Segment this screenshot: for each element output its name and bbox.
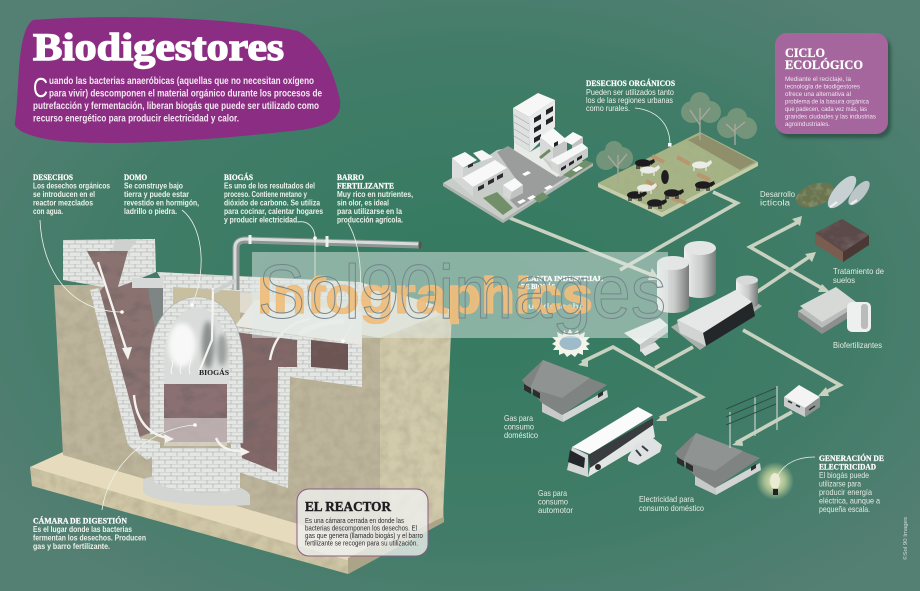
pipe inside dome xyxy=(199,288,213,372)
heading: ciclo ecológico: CICLO xyxy=(785,45,825,60)
text: cámara de digestión: fermentan los desechos. Producen xyxy=(33,534,146,542)
back wall patch xyxy=(173,287,240,330)
watermark text outline: Sol90images xyxy=(258,250,666,335)
illustration: industrial biogas plant xyxy=(624,241,762,356)
biogas pipe xyxy=(214,235,422,292)
text: desechos orgánicos: DESECHOS ORGÁNICOS xyxy=(586,78,676,88)
text: right labels: ictícola xyxy=(760,198,790,208)
lintel and pillar xyxy=(132,278,173,327)
city base xyxy=(443,148,593,220)
text: cámara de digestión xyxy=(33,516,146,551)
text: lower labels xyxy=(504,413,704,515)
icon: fish farming xyxy=(792,172,873,212)
text: desechos: con agua. xyxy=(33,207,63,216)
illustration: rural farm xyxy=(596,92,758,217)
text: domo: ladrillo o piedra. xyxy=(124,207,177,216)
illustration: house with gas xyxy=(522,360,608,422)
storage tanks xyxy=(657,241,758,313)
intake chamber xyxy=(87,251,155,438)
text: cámara de digestión: gas y barro fertilizante. xyxy=(33,542,110,551)
text: barro fertilizante: para utilizarse en la xyxy=(337,207,402,216)
text: lower labels: Gas para xyxy=(538,488,567,498)
text: domo: tierra y puede estar xyxy=(124,190,189,199)
ciclo description: agroindustriales. xyxy=(785,121,830,128)
text: desechos orgánicos: los de las regiones urbanas xyxy=(586,95,673,105)
introduction text xyxy=(33,72,322,124)
text: biogás xyxy=(224,172,323,224)
flow arrows xyxy=(98,262,344,456)
text: generación de electricidad xyxy=(819,453,884,514)
text: desechos orgánicos: como rurales. xyxy=(586,103,630,113)
text: right labels xyxy=(760,189,884,350)
parked cars xyxy=(517,166,583,204)
ciclo description: Mediante el reciclaje, la xyxy=(785,76,851,83)
text: biogás: proceso. Contiene metano y xyxy=(224,190,307,199)
illustration: generator building xyxy=(784,385,820,417)
plant label under watermark xyxy=(521,274,603,311)
icon: biofertilizer xyxy=(798,287,871,334)
text: barro fertilizante: BARRO xyxy=(337,173,364,182)
ciclo description: ofrece una alternativa al xyxy=(785,91,851,98)
outlet top cover xyxy=(235,300,362,345)
text: domo: DOMO xyxy=(124,173,147,182)
brick dome xyxy=(150,297,243,443)
back brick band xyxy=(157,272,362,302)
panel: title and introduction xyxy=(15,17,340,143)
foundation slab xyxy=(30,452,444,574)
icon: gas flame xyxy=(552,329,590,357)
text: biogás: y producir electricidad. xyxy=(224,216,299,224)
plant platform xyxy=(671,290,762,350)
intake chimney bricks xyxy=(63,239,156,287)
street xyxy=(497,146,590,208)
text: desechos orgánicos: Pueden ser utilizados tanto xyxy=(586,87,674,97)
heading: el reactor: EL REACTOR xyxy=(305,500,392,515)
reactor top surface xyxy=(157,272,452,340)
plant label under watermark: PLANTA INDUSTRIAL xyxy=(521,274,603,283)
text: desechos xyxy=(33,173,110,216)
gas space inside dome xyxy=(164,307,229,386)
heading: ciclo ecológico: ECOLÓGICO xyxy=(785,57,863,72)
text: generación de electricidad: utilizarse para xyxy=(819,478,861,488)
text: desechos: reactor mezclados xyxy=(33,198,93,208)
reactor description: bacterias descomponen los desechos. El xyxy=(305,524,417,532)
leader: generación de electricidad xyxy=(778,457,815,475)
digester base bricks xyxy=(143,448,250,506)
text: generación de electricidad: eléctrica, aunque a xyxy=(819,496,880,506)
left building complex xyxy=(452,150,523,200)
text: cámara de digestión: Es el lugar donde las bacterias xyxy=(33,525,132,534)
panel: reactor illustration xyxy=(30,235,452,574)
text: generación de electricidad: El biogás puede xyxy=(819,470,869,480)
text: generación de electricidad: pequeña escala. xyxy=(819,504,870,514)
reactor front wall xyxy=(54,285,380,548)
illustration: power lines xyxy=(726,386,777,448)
ciclo description: tecnología de biodigestores xyxy=(785,84,861,90)
small plant building xyxy=(624,318,668,356)
text: lower labels: doméstico xyxy=(504,430,538,440)
plant label under watermark: Sus desechos xyxy=(521,302,592,311)
text: barro fertilizante: Muy rico en nutrientes, xyxy=(337,190,413,199)
introduction text: uando las bacterias anaeróbicas (aquellas que no necesitan oxígeno xyxy=(49,76,314,87)
icon: light bulb xyxy=(756,462,794,500)
introduction text: recurso energético para producir electricidad y calor. xyxy=(33,114,239,124)
ciclo description: problema de la basura orgánica xyxy=(785,98,869,106)
shed xyxy=(677,290,755,346)
text: biogás: dióxido de carbono. Se utiliza xyxy=(224,198,320,208)
text: lower labels: consumo doméstico xyxy=(639,503,704,513)
text: lower labels: automotor xyxy=(538,505,573,515)
text: lower labels: Electricidad para xyxy=(639,494,694,504)
biogas bubbles xyxy=(171,356,191,374)
text: biogás: para cocinar, calentar hogares xyxy=(224,207,323,216)
copyright credit: ©Sol 90 Images xyxy=(902,517,909,560)
introduction text: C xyxy=(33,72,48,103)
illustration: house with electricity xyxy=(675,433,761,495)
text: domo xyxy=(124,173,199,216)
outlet chamber xyxy=(235,332,297,472)
text: desechos: se introducen en el xyxy=(33,190,95,199)
text: right labels: Desarrollo xyxy=(760,189,795,199)
title: Biodigestores xyxy=(33,26,284,69)
icon: soil block xyxy=(815,219,869,262)
tower xyxy=(513,93,555,152)
panel: ciclo ecológico xyxy=(775,33,891,138)
label: biogás in dome: BIOGÁS xyxy=(199,367,229,377)
introduction text: para vivir) descomponen el material orgánico durante los procesos de xyxy=(49,88,322,100)
flow arrows between stages xyxy=(510,192,840,446)
plant label under watermark: DE BIOGÁS xyxy=(521,281,555,291)
text: lower labels: consumo xyxy=(538,496,568,506)
trees xyxy=(596,92,757,183)
reactor description: Es una cámara cerrada en donde las xyxy=(305,516,404,525)
watermark text orange: Infographics xyxy=(257,267,593,324)
reactor description: gas que genera (llamado biogás) y el barro xyxy=(305,531,423,540)
right building complex xyxy=(514,128,588,177)
title panel shape xyxy=(15,17,340,143)
text: barro fertilizante: FERTILIZANTE xyxy=(337,182,394,190)
reactor right face xyxy=(380,310,452,548)
text: generación de electricidad: producir energía xyxy=(819,487,872,497)
text: desechos: Los desechos orgánicos xyxy=(33,182,110,190)
text: barro fertilizante: sin olor, es ideal xyxy=(337,198,389,208)
text: lower labels: consumo xyxy=(504,422,534,432)
text: generación de electricidad: GENERACIÓN DE xyxy=(819,453,884,463)
digestion chamber contents xyxy=(164,384,227,442)
reactor description xyxy=(305,516,423,548)
ciclo description xyxy=(785,76,877,128)
text: generación de electricidad: ELECTRICIDAD xyxy=(819,462,876,472)
leader lines for the reactor xyxy=(40,210,361,510)
text: right labels: suelos xyxy=(833,275,855,285)
introduction text: putrefacción y fermentación, liberan biogás que puede ser utilizado como xyxy=(33,101,319,112)
biogas cloud xyxy=(168,321,227,369)
text: desechos: DESECHOS xyxy=(33,173,73,182)
heading: ciclo ecológico xyxy=(785,45,863,72)
text: right labels: Tratamiento de xyxy=(833,266,884,276)
text: desechos orgánicos xyxy=(586,78,676,146)
green areas xyxy=(483,160,593,215)
intake outer wall stripe xyxy=(90,288,160,460)
text: right labels: Biofertilizantes xyxy=(833,340,882,350)
watermark band xyxy=(252,250,668,338)
reactor description: fertilizante se recogen para su utilización. xyxy=(305,538,418,548)
text: biogás: Es uno de los resultados del xyxy=(224,182,315,190)
chimney inner back xyxy=(112,240,137,252)
ciclo description: que padecen, cada vez más, las xyxy=(785,106,868,113)
panel: el reactor xyxy=(297,489,428,556)
dry patches xyxy=(646,156,710,203)
text: domo: Se construye bajo xyxy=(124,182,183,190)
text: barro fertilizante xyxy=(337,173,413,224)
text: biogás: BIOGÁS xyxy=(224,172,254,182)
outlet chamber bricks xyxy=(226,326,362,488)
text: lower labels: Gas para xyxy=(504,413,533,423)
dry vegetation strip xyxy=(688,134,755,170)
cattle xyxy=(627,159,715,209)
illustration: bus and car xyxy=(567,407,662,477)
ciclo description: grandes ciudades y las industrias xyxy=(785,114,877,120)
text: cámara de digestión: CÁMARA DE DIGESTIÓN xyxy=(33,516,127,526)
text: domo: revestido en hormigón, xyxy=(124,198,199,208)
overflow chamber xyxy=(311,340,348,370)
text: barro fertilizante: producción agrícola. xyxy=(337,216,403,224)
illustration: urban buildings xyxy=(443,93,593,223)
mist over digestion chamber xyxy=(164,418,227,446)
